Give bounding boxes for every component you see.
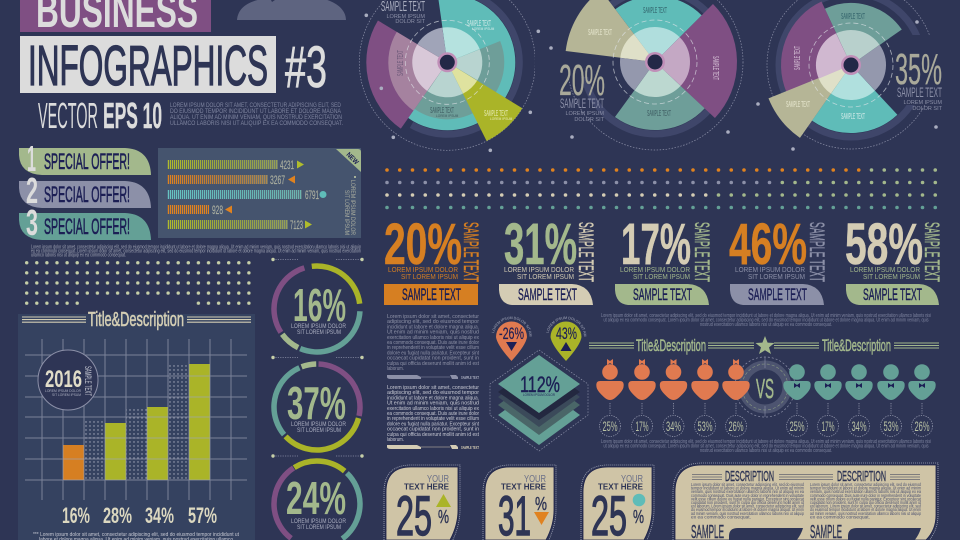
card 31% down (483, 465, 556, 540)
text column 2: ea commodo consequat. Duis aute irure dolor (387, 411, 479, 417)
subtitle: VECTOR (38, 95, 98, 136)
figure percentages: 26% (914, 418, 930, 434)
description card (673, 463, 938, 540)
vs emblem: VS (756, 373, 774, 404)
banner 3: 3 (26, 202, 38, 243)
stat 17%: SAMPLE TEXT (633, 285, 692, 304)
description column 2: velit esse cillum dolore eu fugiat nulla pariatur. Excepteur sint occaecat (810, 496, 922, 501)
description column 1: est laborum. Lorem ipsum dolor sit amet, consectetur adipiscing elit, sed (691, 504, 804, 509)
stat 46%: SIT LOREM IPSUM (748, 274, 805, 281)
text column 2: dolore eu fugiat nulla pariatur. Excepteur sint (387, 421, 479, 427)
figure 53% (691, 359, 719, 400)
text column 2: adipiscing elit, sed do eiusmod tempor (387, 390, 479, 396)
new badge (336, 149, 361, 172)
figure percentages: 25% (602, 418, 618, 434)
pie 1 labels: LOREM IPSUM (436, 114, 459, 118)
title: business (20, 0, 211, 38)
pie chart 3 (756, 0, 943, 151)
description card: DESCRIPTION (837, 468, 886, 485)
donut 16%: SIT LOREM IPSUM (297, 329, 341, 336)
divider 1 (387, 375, 479, 380)
donut 37%: 37% (287, 377, 346, 429)
pie 2 labels: DOLOR SIT (574, 117, 605, 123)
chart heading (22, 309, 251, 331)
sample label 2 (810, 522, 921, 540)
pie 2 labels (559, 5, 721, 123)
stat 31%: LOREM IPSUM DOLOR (504, 267, 574, 274)
text column 1: exercitation ullamco laboris nisi ut aliquip ex (387, 335, 479, 341)
figure percentages: 26% (728, 418, 744, 434)
stat 46%: LOREM IPSUM DOLOR (735, 267, 805, 274)
intro text: DO EIUSMOD TEMPOR INCIDIDUNT UT LABORE ET DOLORE MAGNA (170, 108, 342, 115)
description column 2: do eiusmod tempor incididunt ut labore et dolore magna aliqua. Ut enim (810, 507, 921, 512)
offers paragraph: ex ea commodo consequat. Lorem ipsum dolor sit amet, consectetur adipiscing elit, sed do eiusmod tempor incididunt ut labore et dolore magna aliqua. Ut enim ad minim veniam, quis nostrud exercitation (31, 248, 361, 254)
panel: horizontal bars (158, 148, 361, 238)
pie 2 labels: LOREM IPSUM (565, 111, 604, 117)
isometric layers (490, 350, 588, 451)
title block (20, 0, 343, 136)
card 25% circle: % (633, 507, 644, 527)
figure percentages: 34% (666, 418, 681, 434)
donut 16%: 16% (293, 279, 346, 331)
card 25% circle: TEXT HERE (598, 482, 643, 492)
pin -26%: LOREM IPSUM DOLOR SIT AMET (492, 316, 532, 336)
pie 2 labels: SAMPLE TEXT (588, 27, 612, 37)
pie 3 labels: SAMPLE TEXT (792, 46, 802, 70)
bars (63, 364, 210, 480)
year badge: SIT LOREM IPSUM (52, 392, 81, 397)
stat 17%: SIT LOREM IPSUM (633, 274, 690, 281)
figure 26% (908, 364, 936, 400)
donut 24%: 24% (286, 472, 346, 524)
text column 2: laborum. (387, 437, 404, 443)
card 25% up: % (438, 507, 449, 527)
banner 2: 2 (26, 170, 38, 211)
description column 2: Lorem ipsum dolor sit amet, consectetur adipiscing elit, sed do eiusmod (810, 482, 921, 487)
stat 58% (845, 212, 943, 305)
bar values: 34% (145, 503, 174, 528)
pie 1 labels: LOREM IPSUM (490, 117, 513, 121)
pin 43% (546, 316, 586, 361)
grid (25, 339, 247, 500)
description column 2: cupidatat non proident, sunt in culpa qui officia deserunt mollit anim id (810, 500, 921, 505)
vs emblem (735, 357, 795, 417)
text column 1: dolore eu fugiat nulla pariatur. Excepteur sint (387, 350, 479, 356)
figure 53% (877, 364, 905, 400)
stat 46%: SAMPLE TEXT (805, 222, 828, 282)
intro text (170, 102, 343, 127)
offers paragraph: ullamco laboris nisi ut aliquip ex ea commodo consequat. (31, 252, 126, 258)
stat 17%: SAMPLE TEXT (690, 222, 713, 282)
text column 1 (387, 314, 479, 372)
bar values: 16% (62, 503, 90, 528)
pie 3 labels: DOLOR SIT (912, 106, 943, 112)
stat 20%: 20% (384, 212, 462, 277)
figure percentages: 25% (790, 418, 804, 434)
title: number: #3 (285, 35, 327, 100)
description column 2: veniam, quis nostrud exercitation ullamco laboris nisi ut aliquip ex ea (810, 489, 921, 494)
intro text: LOREM IPSUM DOLOR SIT AMET, CONSECTETUR ADIPISCING ELIT, SED (170, 102, 341, 109)
pie 3 labels: SAMPLE TEXT (786, 99, 810, 109)
teal figures (783, 364, 936, 400)
figure 17% (814, 364, 842, 400)
bar 4: 928 (212, 203, 223, 217)
pie 3 labels: SAMPLE TEXT (841, 111, 865, 121)
year badge: SAMPLE TEXT (83, 366, 93, 396)
side label: LOREM IPSUM DOLOR (349, 180, 355, 236)
stat 20%: SAMPLE TEXT (459, 222, 482, 282)
paragraph top: nostrud exercitation ullamco laboris nisi ut aliquip ex ea commodo consequat. (700, 322, 832, 328)
text column 1: Ut enim ad minim veniam, quis nostrud (387, 330, 479, 336)
text column 1: Lorem ipsum dolor sit amet, consectetur (387, 314, 479, 320)
stat 58%: SAMPLE TEXT (920, 222, 943, 282)
figure 26% (722, 359, 750, 400)
stat 58%: SIT LOREM IPSUM (863, 274, 920, 281)
stat 31% (499, 212, 597, 305)
side label: SIT LOREM IPSUM (343, 190, 349, 235)
pie 1 labels: DOLOR SIT (395, 19, 426, 25)
panel: bar chart (18, 309, 255, 540)
text column 1: culpa qui officia deserunt mollit anim id est (387, 361, 479, 367)
figure percentages: 34% (852, 418, 866, 434)
paragraph bottom (601, 439, 931, 454)
paragraph bottom: nostrud exercitation ullamco laboris nisi ut aliquip ex ea commodo consequat. (700, 448, 832, 454)
donut 37%: LOREM IPSUM DOLOR (291, 421, 346, 428)
figure percentages: 53% (884, 418, 898, 434)
bar 1 (167, 158, 304, 172)
divider 1: SAMPLE TEXT (461, 375, 479, 380)
text column 2 (387, 385, 479, 443)
description column 2: ad minim veniam, quis nostrud exercitation ullamco laboris nisi ut aliquip (810, 511, 921, 516)
stat 58%: LOREM IPSUM DOLOR (850, 267, 920, 274)
banner 3: SPECIAL OFFER! (44, 214, 130, 239)
stat 20%: SAMPLE TEXT (402, 285, 461, 304)
bar 5 (167, 218, 312, 232)
pie chart 2 (535, 0, 743, 150)
offers paragraph (31, 244, 361, 258)
dot matrix right (387, 170, 937, 208)
description column 1: tempor incididunt ut labore et dolore magna aliqua. Ut enim ad minim (691, 486, 804, 491)
description column 2: est laborum. Lorem ipsum dolor sit amet, consectetur adipiscing elit, sed (810, 504, 921, 509)
year badge (38, 350, 98, 410)
pie 1 labels: LOREM IPSUM (386, 14, 425, 20)
text column 1: adipiscing elit, sed do eiusmod tempor (387, 319, 479, 325)
year badge: LOREM IPSUM DOLOR (45, 388, 81, 393)
title block: EPS 10 (103, 95, 162, 136)
dot matrix left (22, 258, 254, 308)
donut 37%: SIT LOREM IPSUM (297, 427, 341, 434)
card 25% circle: YOUR (621, 474, 643, 485)
infographic canvas: SAMPLE TEXT (484, 108, 508, 118)
sample label 1 (691, 522, 803, 540)
special offer banners (19, 138, 151, 243)
bar 4 (167, 203, 232, 217)
card 25% up: YOUR (427, 474, 449, 485)
text column 2: culpa qui officia deserunt mollit anim id est (387, 432, 479, 438)
text column 2: in reprehenderit in voluptate velit esse cillum (387, 416, 479, 422)
card 31% down: YOUR (524, 474, 546, 485)
bar 2 (167, 173, 295, 187)
pie 2 labels: SAMPLE TEXT (560, 95, 604, 111)
title: infographics (20, 34, 276, 98)
pie 3 labels (786, 11, 943, 121)
pie chart 1 (352, 0, 543, 158)
figure 34% (845, 364, 873, 400)
pie 1 labels: SAMPLE TEXT (395, 50, 405, 76)
description column 1: commodo consequat. Duis aute irure dolor in reprehenderit in voluptate (691, 493, 804, 498)
stipple columns (84, 363, 189, 480)
bar values: 57% (188, 503, 217, 528)
banner 3 (19, 202, 151, 243)
bar values: 28% (103, 503, 132, 528)
intro text: ULLAMCO LABORIS NISI UT ALIQUIP EX EA COMMODO CONSEQUAT. (170, 120, 343, 127)
stat 20%: LOREM IPSUM DOLOR (388, 267, 458, 274)
description column 1: veniam, quis nostrud exercitation ullamco laboris nisi ut aliquip ex ea (691, 489, 804, 494)
new badge: NEW (345, 151, 360, 167)
pie 2 labels: 20% (559, 56, 605, 105)
stat 17% (615, 212, 713, 305)
text column 2: incididunt ut labore et dolore magna aliqua. (387, 395, 479, 401)
donut 24%: LOREM IPSUM DOLOR (291, 518, 346, 525)
description card: DESCRIPTION (725, 468, 774, 485)
comparison heading: Title&Description (822, 336, 891, 355)
pin -26% (492, 316, 532, 361)
bar 3: 6791 (305, 188, 319, 202)
bar 1: 4231 (280, 158, 294, 172)
divider 2 (387, 445, 479, 450)
pin 43%: LOREM IPSUM DOLOR SIT AMET (546, 316, 586, 336)
bar 5: 7123 (290, 218, 303, 232)
orange figures (596, 359, 750, 400)
description column 2: ex ea commodo consequat. (810, 514, 870, 519)
comparison heading: Title&Description (636, 336, 706, 355)
stat 58%: 58% (845, 212, 923, 277)
stat 31%: SAMPLE TEXT (518, 285, 577, 304)
pie 1 labels (381, 0, 513, 121)
stat 20% (384, 212, 482, 305)
figure 17% (628, 359, 656, 400)
stat 17%: 17% (621, 212, 691, 277)
stat 17%: LOREM IPSUM DOLOR (620, 267, 690, 274)
description column 1 (691, 482, 805, 519)
card 25% circle (581, 465, 654, 540)
card 25% up: TEXT HERE (404, 482, 449, 492)
figure percentages: 17% (822, 418, 834, 434)
text column 2: Lorem ipsum dolor sit amet, consectetur (387, 385, 479, 391)
year badge: 2016 (45, 366, 82, 393)
pie 3 labels: LOREM IPSUM (903, 100, 942, 106)
pie 2 labels: SAMPLE TEXT (647, 108, 671, 118)
stat 46%: 46% (729, 212, 807, 277)
bar 3 (167, 188, 326, 202)
divider 2: SAMPLE TEXT (461, 445, 479, 450)
text column 1: laborum. (387, 366, 404, 372)
stat 20%: SIT LOREM IPSUM (401, 274, 458, 281)
chart heading: Title&Description (88, 309, 184, 331)
banner 2 (19, 170, 151, 211)
bar values (62, 503, 217, 528)
description column 1: do eiusmod tempor incididunt ut labore et dolore magna aliqua. Ut enim (691, 507, 804, 512)
stat 31%: SAMPLE TEXT (574, 222, 597, 282)
pie 2 labels: SAMPLE TEXT (711, 56, 721, 80)
donut 24%: SIT LOREM IPSUM (297, 524, 341, 531)
description column 1: Lorem ipsum dolor sit amet, consectetur adipiscing elit, sed do eiusmod (691, 482, 804, 487)
text column 2: exercitation ullamco laboris nisi ut aliquip ex (387, 406, 479, 412)
pin 43%: 43% (556, 324, 577, 343)
icon: star (756, 336, 774, 354)
description column 2: tempor incididunt ut labore et dolore magna aliqua. Ut enim ad minim (810, 486, 921, 491)
banner 1: 1 (27, 138, 36, 179)
side label (343, 176, 356, 236)
figure percentages: 17% (636, 418, 648, 434)
stat 46% (729, 212, 828, 305)
description column 1: ex ea commodo consequat. (691, 514, 751, 519)
description column 1: ad minim veniam, quis nostrud exercitation ullamco laboris nisi ut aliquip (691, 511, 804, 516)
text column 1: incididunt ut labore et dolore magna aliqua. (387, 324, 479, 330)
card 31% down: TEXT HERE (501, 482, 546, 492)
banner 1: SPECIAL OFFER! (44, 149, 130, 174)
description column 2: commodo consequat. Duis aute irure dolor in reprehenderit in voluptate (810, 493, 921, 498)
pie 1 labels: LOREM IPSUM (472, 27, 495, 31)
stat 46%: SAMPLE TEXT (748, 285, 807, 304)
text column 1: occaecat cupidatat non proident, sunt in (387, 356, 479, 362)
bar footnote: *** Lorem ipsum dolor sit amet, consectetur adipiscing elit, sed do eiusmod tempor incididunt ut (33, 532, 239, 538)
intro text: ALIQUA. UT ENIM AD MINIM VENIAM, QUIS NOSTRUD EXERCITATION (170, 114, 342, 121)
figure 25% (596, 359, 624, 400)
offers paragraph: Lorem ipsum dolor sit amet, consectetur adipiscing elit, sed do eiusmod tempor incididunt ut labore et dolore magna aliqua. Ut enim ad minim veniam, quis nostrud exercitation ullamco laboris nisi ut aliquip (31, 244, 361, 250)
stat 31%: SIT LOREM IPSUM (517, 274, 574, 281)
text column 1: ea commodo consequat. Duis aute irure dolor (387, 340, 479, 346)
pin -26%: -26% (499, 324, 524, 343)
banner 1 (19, 138, 151, 179)
comparison heading (589, 336, 939, 355)
donut 24% (256, 443, 378, 540)
figure percentages: 53% (698, 418, 712, 434)
figure percentages (600, 403, 932, 436)
pie 3 labels: SAMPLE TEXT (841, 11, 865, 21)
card 25% up (384, 465, 460, 540)
bar footnote (33, 532, 239, 540)
text column 2: Ut enim ad minim veniam, quis nostrud (387, 401, 479, 407)
donut 16%: LOREM IPSUM DOLOR (291, 323, 346, 330)
banner 2: SPECIAL OFFER! (44, 182, 130, 207)
donut 37% (256, 346, 378, 468)
figure 34% (660, 359, 687, 400)
isometric layers: 112% (520, 372, 560, 397)
icon: cloud (237, 0, 346, 20)
title: infographics: INFOGRAPHICS (28, 34, 268, 98)
pie 2 labels: SAMPLE TEXT (643, 5, 667, 15)
text column 2: occaecat cupidatat non proident, sunt in (387, 427, 479, 433)
description column 1: cupidatat non proident, sunt in culpa qui officia deserunt mollit anim id (691, 500, 804, 505)
description column 2 (810, 482, 922, 519)
paragraph top (601, 313, 931, 328)
text column 1: in reprehenderit in voluptate velit esse cillum (387, 345, 479, 351)
bar 2: 3267 (270, 173, 285, 187)
pie 1 labels: SAMPLE TEXT (430, 105, 454, 115)
stat 31%: 31% (504, 212, 577, 277)
dotted connectors (271, 258, 364, 458)
description column 1: velit esse cillum dolore eu fugiat nulla pariatur. Excepteur sint occaecat (691, 496, 805, 501)
figure 25% (783, 364, 811, 400)
isometric layers: LOREM IPSUM DOLOR (523, 393, 555, 397)
donut 16% (258, 250, 376, 368)
pie 1 labels: SAMPLE TEXT (467, 18, 491, 28)
card 31% down: % (535, 494, 547, 514)
